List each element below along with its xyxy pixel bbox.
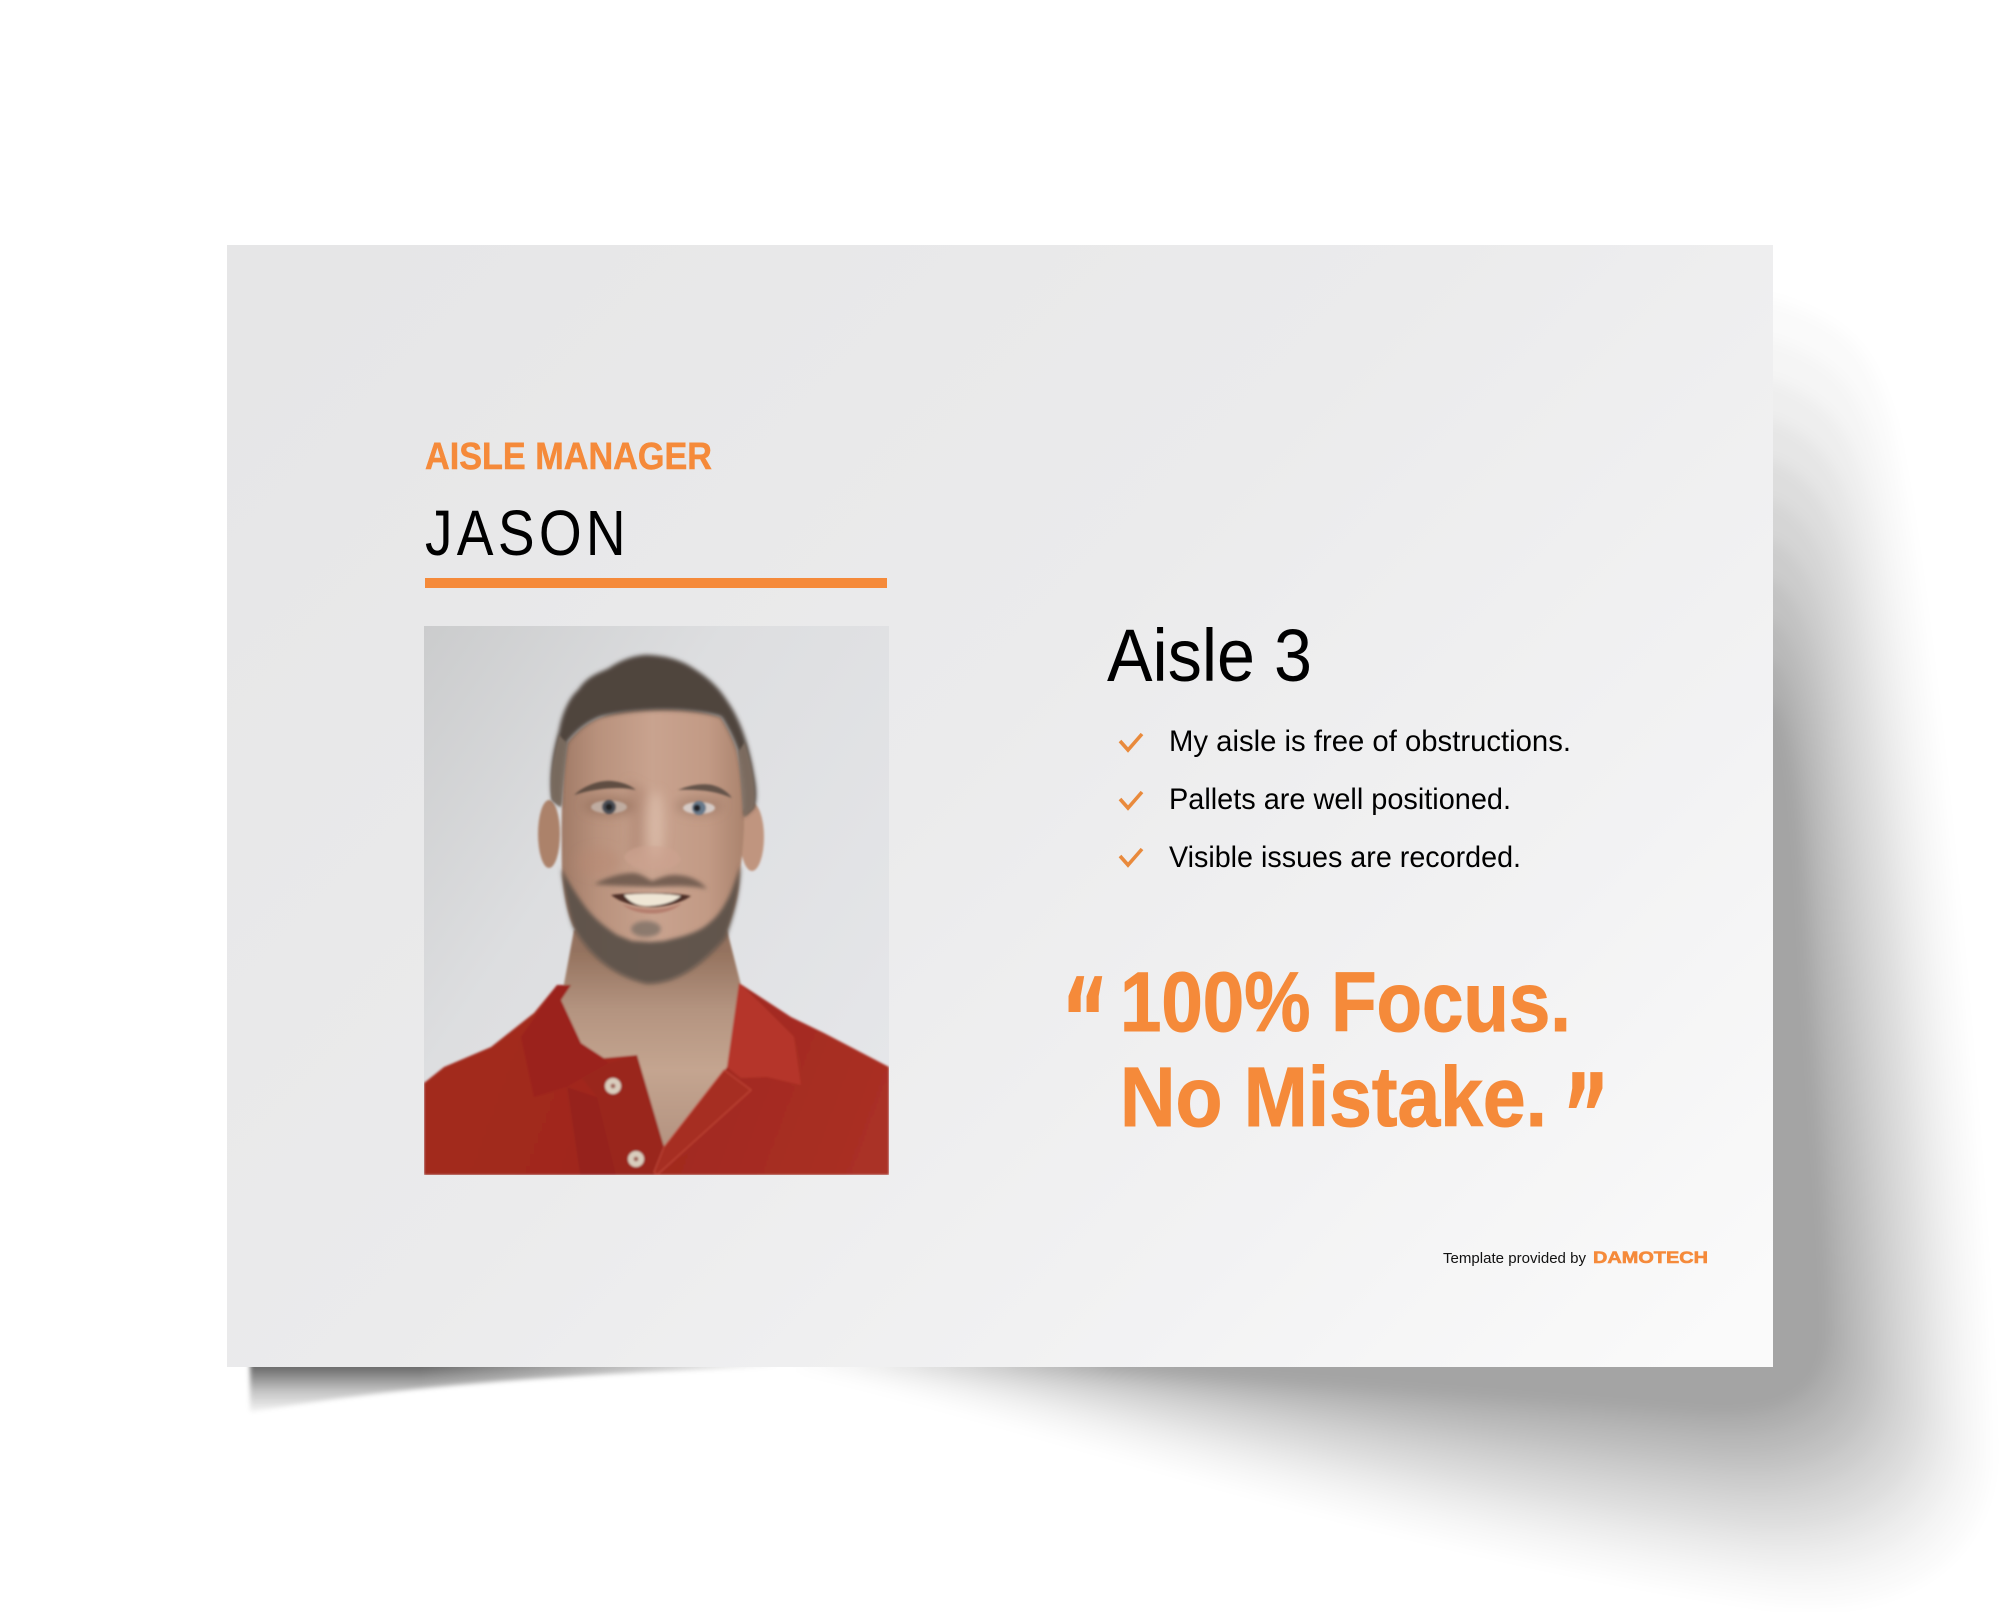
quote line 2: No Mistake.: [1120, 1050, 1547, 1144]
icon: check: [1120, 849, 1142, 865]
buttons: [605, 1078, 621, 1094]
opening quote mark: “: [1061, 954, 1109, 1088]
orange rule: [425, 578, 887, 588]
left collar: [542, 985, 597, 1056]
left fold shadow: [567, 1087, 616, 1175]
portrait photo: [424, 626, 889, 1175]
beard: [561, 865, 741, 984]
item 3: Visible issues are recorded.: [1169, 841, 1521, 874]
footer credit: Template provided by: [1443, 1250, 1586, 1267]
item 1: My aisle is free of obstructions.: [1169, 725, 1571, 758]
card panel: [227, 245, 1773, 1367]
name heading: JASON: [425, 497, 630, 569]
item 2: Pallets are well positioned.: [1169, 783, 1511, 816]
quote line 1: 100% Focus.: [1120, 955, 1571, 1049]
right placket: [654, 1070, 751, 1175]
logo wordmark: DAMOTECH: [1593, 1248, 1708, 1267]
lower lip: [624, 904, 680, 914]
checklist: [1120, 725, 1571, 874]
quote: [1061, 954, 1610, 1184]
aisle heading: Aisle 3: [1107, 614, 1312, 697]
face: [560, 708, 744, 944]
eyebrows: [574, 781, 636, 795]
right eye: [683, 802, 715, 814]
mouth: [611, 893, 691, 907]
hair: [551, 655, 756, 817]
neck: [561, 930, 744, 1150]
drop shadow: bottom left curl: [246, 1367, 747, 1411]
face soft shading: [584, 786, 720, 848]
soul patch: [631, 921, 661, 937]
icon: check: [1120, 734, 1142, 750]
icon: check: [1120, 792, 1142, 808]
closing quote mark: ”: [1562, 1050, 1610, 1184]
ears: [538, 800, 560, 868]
moustache: [594, 873, 707, 889]
shirt: [424, 983, 889, 1175]
right collar: [727, 983, 801, 1085]
role heading: AISLE MANAGER: [425, 436, 712, 478]
drop shadow: right and bottom page curl: [800, 300, 1990, 1605]
nose: [629, 848, 656, 855]
left placket: [582, 1055, 664, 1175]
sideburns: [551, 735, 567, 807]
left eye: [591, 800, 627, 814]
footer credit: [1443, 1248, 1708, 1267]
